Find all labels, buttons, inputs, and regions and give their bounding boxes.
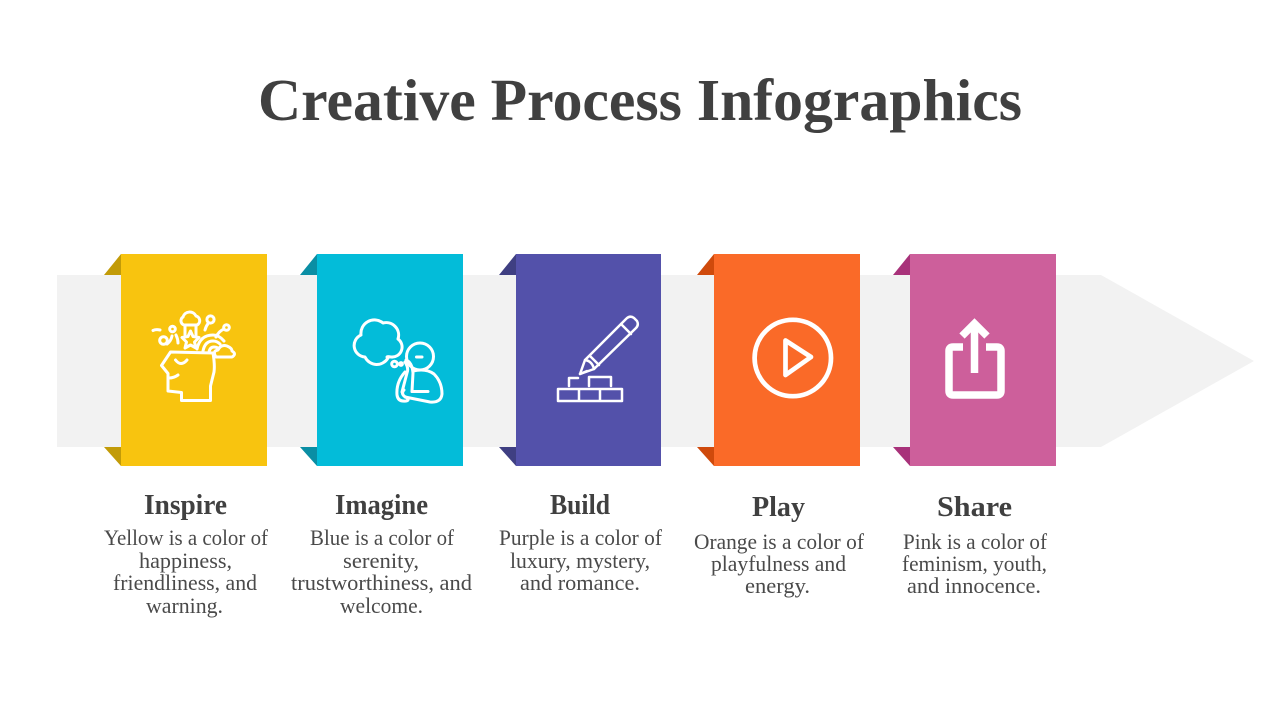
step text: inspire: Inspire <box>144 490 227 521</box>
panel: build <box>499 254 661 466</box>
step text: build: and romance. <box>520 570 640 595</box>
step text: inspire: friendliness, and <box>113 570 257 595</box>
icon: play button <box>755 320 831 396</box>
step text: play: Orange is a color of <box>694 529 865 554</box>
step text: build <box>499 490 663 595</box>
step text: imagine: trustworthiness, and <box>291 570 472 595</box>
step text: inspire: happiness, <box>139 548 232 573</box>
step text: share: feminism, youth, <box>902 551 1047 576</box>
panel: play <box>697 254 860 466</box>
step text: play: energy. <box>745 573 810 598</box>
step text: build: Build <box>550 490 610 521</box>
step text: play <box>694 492 865 598</box>
arrow band <box>57 275 1254 447</box>
panel: inspire <box>104 254 267 466</box>
step text: imagine: welcome. <box>340 593 423 618</box>
step text: play: Play <box>752 492 805 523</box>
icon: thinking person <box>354 320 442 402</box>
step text: build: luxury, mystery, <box>510 548 650 573</box>
step text: inspire: warning. <box>146 593 223 618</box>
step text: build: Purple is a color of <box>499 525 663 550</box>
title: Creative Process Infographics <box>258 67 1022 133</box>
step text: imagine: Imagine <box>335 490 428 521</box>
step text: imagine: Blue is a color of <box>310 525 455 550</box>
icon: head with ideas <box>153 312 234 400</box>
icon: pencil and bricks <box>558 317 638 401</box>
step text: imagine <box>291 490 472 618</box>
step text: imagine: serenity, <box>343 548 419 573</box>
step text: play: playfulness and <box>711 551 846 576</box>
step text: share: and innocence. <box>907 573 1041 598</box>
panel: share <box>893 254 1056 466</box>
step text: share: Pink is a color of <box>903 529 1048 554</box>
step text: inspire: Yellow is a color of <box>104 525 269 550</box>
step text: inspire <box>104 490 269 618</box>
panel: imagine <box>300 254 463 466</box>
icon: share <box>949 324 1001 395</box>
step text: share <box>902 492 1048 598</box>
step text: share: Share <box>937 492 1012 523</box>
